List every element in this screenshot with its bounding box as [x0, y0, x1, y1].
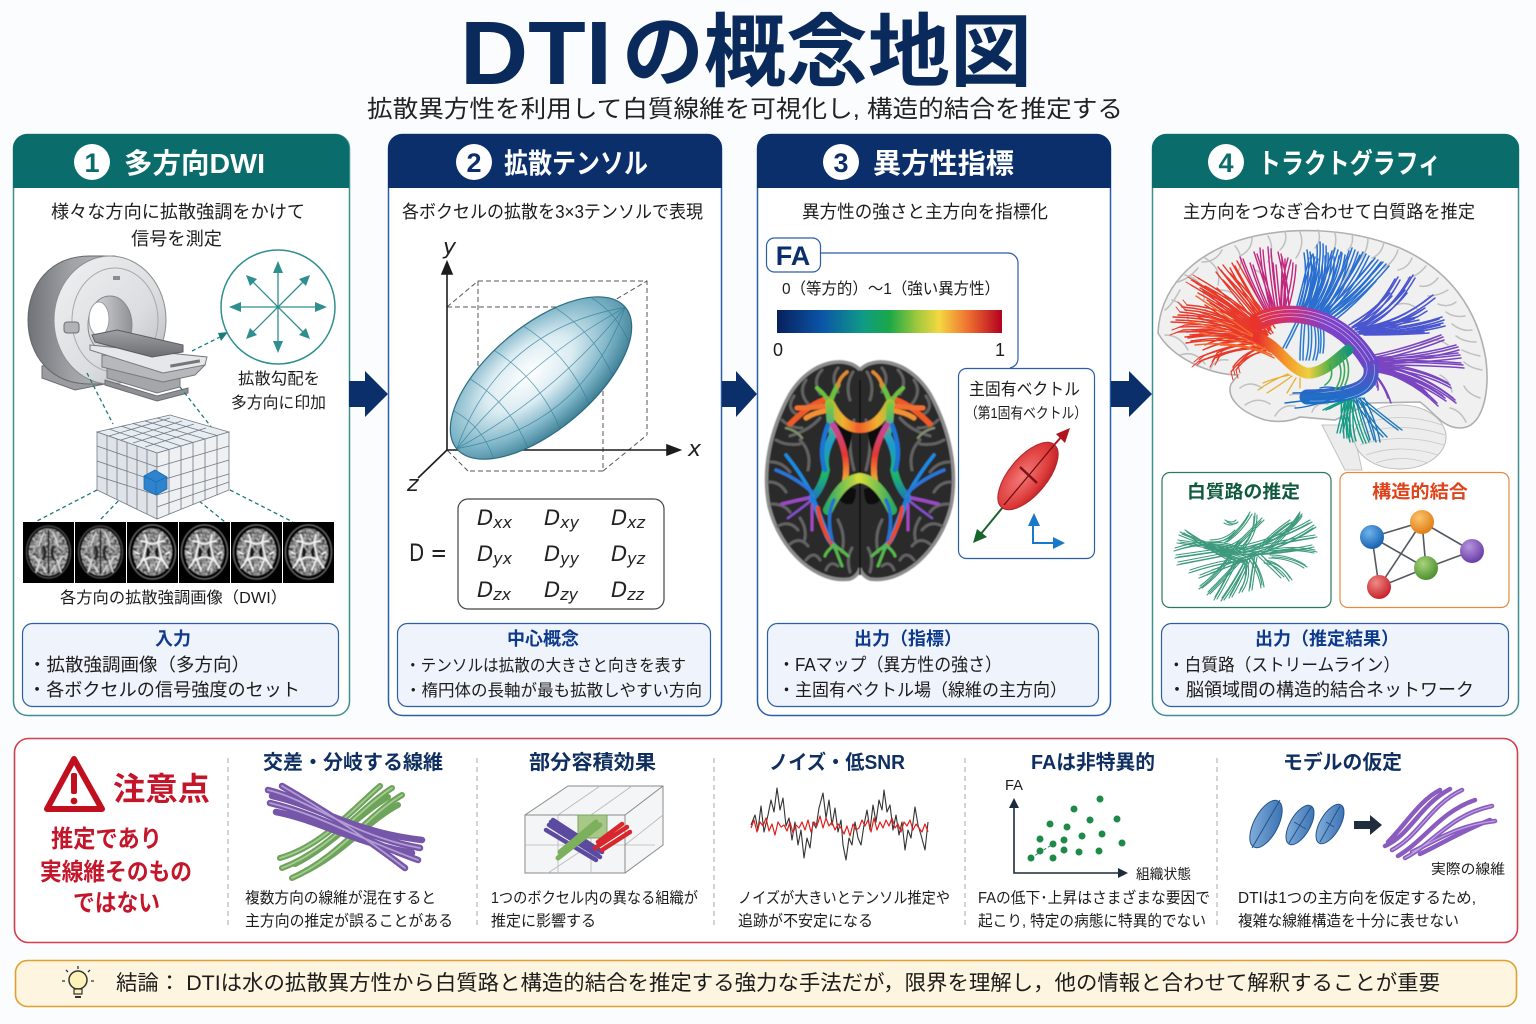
panel 1 description: 様々な方向に拡散強調をかけて: [51, 202, 305, 222]
tensor matrix: D: [611, 578, 627, 602]
input box: ・各ボクセルの信号強度のセット: [28, 680, 300, 700]
green fill of small gap: [1325, 355, 1348, 390]
tensor matrix: [409, 499, 664, 609]
panel 2 header: [388, 134, 722, 188]
eigenvector box: （第1固有ベクトル）: [965, 405, 1087, 422]
panel 2 description: 各ボクセルの拡散を3×3テンソルで表現: [402, 202, 703, 222]
chart: FA scatter: FA: [1005, 777, 1023, 794]
arrow: step 1 to 2: [349, 371, 388, 417]
panel 1 description: [51, 202, 305, 249]
diffusion ellipsoid: [423, 267, 659, 489]
output box panel 3: [768, 624, 1098, 706]
magenta fibre fan: [1240, 247, 1296, 318]
panel: 2 diffusion tensor: [388, 134, 722, 716]
panel: cautions: [14, 738, 1518, 942]
caution: FA nonspecific: [978, 751, 1210, 930]
blue streamlines under arch: [1285, 387, 1350, 408]
title: の概念地図: [622, 8, 1032, 97]
caution: crossing fibres: 交差・分岐する線維: [263, 751, 443, 774]
blue upward fibre fan: [1295, 242, 1389, 321]
caution statement: 推定であり: [51, 826, 162, 853]
panel 2 header: 拡散テンソル: [504, 148, 648, 179]
subtitle: 拡散異方性を利用して白質線維を可視化し, 構造的結合を推定する: [367, 96, 1123, 123]
green streamlines: [1174, 512, 1317, 601]
title: DTI: [460, 4, 612, 104]
chart: dashed box and axes: z: [406, 472, 419, 497]
yellow fibres: [1258, 374, 1300, 393]
icon: tensors to real fibres: 実際の線維: [1431, 861, 1505, 877]
caution: crossing fibres: [245, 751, 453, 930]
eigenvector box: 主固有ベクトル: [969, 380, 1080, 399]
gradient label: [231, 370, 326, 412]
tensor matrix: zx: [492, 585, 512, 604]
network edges: [1372, 522, 1472, 587]
tractography brain: [1158, 230, 1487, 470]
tensor matrix: D: [477, 542, 493, 566]
tensor matrix: D: [611, 542, 627, 566]
purple fibre fan: [1370, 335, 1464, 406]
caution: FA nonspecific: 起こり, 特定の病態に特異的でない: [978, 912, 1206, 930]
panel 1 description: 信号を測定: [131, 229, 222, 249]
panel 3 header: 異方性指標: [873, 148, 1014, 179]
output box panel 3: 出力（指標）: [854, 628, 962, 649]
FA colour bar: [773, 310, 1005, 360]
caution heading: 注意点: [113, 771, 210, 807]
network nodes: [1360, 510, 1484, 599]
caution: model assumption: DTIは1つの主方向を仮定するため,: [1238, 889, 1476, 907]
blue-violet fibre fan: [1349, 275, 1445, 335]
central arch bundle: [1257, 309, 1375, 401]
icon: light bulb: [62, 966, 94, 997]
brain stem and cerebellum: [1322, 405, 1446, 470]
FA tab: [766, 238, 820, 272]
core concept box: [398, 624, 710, 706]
panel: 1 multi-direction DWI: [13, 134, 350, 716]
input box: 入力: [155, 629, 191, 649]
panel: 4 tractography: [1152, 134, 1519, 716]
panel 1 header: [13, 134, 349, 188]
lower blue-teal fibres: [1354, 398, 1402, 442]
output box panel 3: ・FAマップ（異方性の強さ）: [778, 655, 1002, 675]
DWI image strip: [23, 522, 334, 583]
caution: partial volume: [491, 751, 698, 930]
dashed connectors: [35, 336, 293, 522]
structural connectivity box: 構造的結合: [1372, 482, 1468, 502]
caution: crossing fibres: 主方向の推定が誤ることがある: [245, 912, 453, 930]
panel 1 header: 1: [84, 148, 100, 178]
gyri folds: [1165, 230, 1482, 422]
red eigen ellipsoid with arrows: [973, 428, 1070, 543]
core concept box: 中心概念: [507, 629, 579, 649]
white matter tract box: 白質路の推定: [1187, 482, 1300, 502]
tensor matrix: D: [544, 506, 560, 530]
panel 3 header: [757, 134, 1111, 188]
caution statement: 実線維そのもの: [40, 859, 192, 886]
output box panel 4: [1162, 624, 1508, 706]
DWI caption: 各方向の拡散強調画像（DWI）: [60, 589, 287, 607]
core concept box: ・テンソルは拡散の大きさと向きを表す: [405, 656, 686, 675]
lower teal fibres: [1323, 399, 1369, 443]
panel 4 header: 4: [1218, 148, 1234, 178]
input box: ・拡散強調画像（多方向）: [28, 655, 250, 675]
caution: model assumption: [1238, 750, 1505, 930]
caution statement: ではない: [73, 890, 160, 917]
blue axis icon: [1028, 513, 1065, 549]
title: [460, 4, 1032, 104]
gradient label: 多方向に印加: [231, 394, 326, 412]
chart: dashed box and axes: y: [442, 235, 457, 260]
caution: crossing fibres: 複数方向の線維が混在すると: [245, 889, 436, 907]
core concept box: ・楕円体の長軸が最も拡散しやすい方向: [405, 681, 702, 700]
tensor matrix: D =: [409, 539, 447, 567]
tensor matrix: zy: [559, 585, 579, 604]
conclusion bar: 結論： DTIは水の拡散異方性から白質路と構造的結合を推定する強力な手法だが，限界を理解し，他の情報と合わせて解釈することが重要: [116, 972, 1440, 995]
caution: model assumption: モデルの仮定: [1283, 750, 1402, 774]
tensor matrix: zz: [626, 585, 645, 604]
panel 2 header: 2: [466, 148, 482, 178]
white matter tract box: [1162, 472, 1331, 608]
output box panel 4: ・脳領域間の構造的結合ネットワーク: [1168, 680, 1474, 700]
orange-red fibre overlay: [1190, 296, 1274, 358]
cerebrum outline: [1158, 231, 1487, 428]
caution statement: [40, 826, 192, 917]
FA colour bar: 1: [995, 340, 1005, 360]
inner blue fibres: [1283, 322, 1324, 360]
icon: crossing bundles: [268, 786, 422, 878]
panel: 3 anisotropy metrics: [757, 134, 1111, 716]
tensor matrix: yx: [492, 549, 513, 568]
structural connectivity box: [1340, 472, 1509, 608]
FA tab: FA: [776, 241, 810, 271]
caution: FA nonspecific: FAの低下･上昇はさまざまな要因で: [978, 888, 1210, 907]
icon: MRI scanner: [28, 256, 207, 401]
tensor matrix: xz: [626, 513, 646, 532]
input box: [22, 624, 338, 706]
tensor matrix: xx: [492, 513, 513, 532]
caution: partial volume: 部分容積効果: [529, 751, 656, 774]
panel 3 description: 異方性の強さと主方向を指標化: [802, 202, 1048, 222]
icon: warning triangle: [47, 759, 102, 809]
icon: gradient directions: [221, 250, 335, 364]
eigenvector box: [958, 368, 1094, 558]
tensor matrix: D: [544, 542, 560, 566]
lower rainbow bundle: [1258, 338, 1348, 373]
caution: FA nonspecific: FAは非特異的: [1031, 751, 1155, 774]
arrowhead to gradient circle: [218, 332, 228, 341]
FA colour bar: 0: [773, 340, 783, 360]
arrow: step 3 to 4: [1111, 371, 1152, 417]
caution: model assumption: 複雑な線維構造を十分に表せない: [1238, 912, 1459, 930]
FA callout frame: [820, 253, 1018, 368]
chart: dashed box and axes: x: [687, 437, 702, 462]
caution: noise: [738, 750, 950, 930]
caution: noise: ノイズが大きいとテンソル推定や: [738, 889, 950, 907]
panel 4 header: [1152, 134, 1519, 188]
output box panel 3: ・主固有ベクトル場（線維の主方向）: [778, 680, 1067, 700]
chart: FA scatter: [1005, 777, 1191, 882]
caution: noise: ノイズ・低SNR: [769, 750, 906, 774]
panel 3 header: 3: [833, 148, 849, 178]
caution: partial volume: 推定に影響する: [491, 912, 596, 930]
FA range label: 0（等方的）～1（強い異方性）: [782, 280, 1000, 298]
panel 4 description: 主方向をつなぎ合わせて白質路を推定: [1183, 202, 1475, 222]
gradient label: 拡散勾配を: [238, 370, 320, 388]
chart: dashed box and axes: [406, 235, 702, 497]
tensor matrix: yz: [626, 549, 646, 568]
tensor matrix: xy: [559, 513, 580, 532]
caution: noise: 追跡が不安定になる: [738, 912, 873, 930]
icon: tensors to real fibres: [1243, 789, 1505, 877]
tensor matrix: yy: [559, 549, 580, 568]
red fibre fan: [1170, 261, 1275, 380]
chart: FA scatter: 組織状態: [1136, 866, 1191, 882]
tensor matrix: D: [544, 578, 560, 602]
tensor matrix: D: [477, 506, 493, 530]
chart: noisy signal: [751, 788, 928, 860]
conclusion bar: [16, 960, 1516, 1006]
panel 4 header: トラクトグラフィ: [1258, 147, 1441, 179]
tensor matrix: D: [611, 506, 627, 530]
tensor matrix: D: [477, 578, 493, 602]
icon: voxel with mixed tissues: [525, 786, 663, 873]
output box panel 4: ・白質路（ストリームライン）: [1168, 655, 1400, 675]
FA colour map brain: [767, 362, 953, 580]
panel 1 header: 多方向DWI: [124, 148, 265, 179]
output box panel 4: 出力（推定結果）: [1255, 629, 1399, 649]
caution: partial volume: 1つのボクセル内の異なる組織が: [491, 889, 698, 907]
icon: voxel cube: [97, 415, 229, 519]
arrow: step 2 to 3: [722, 371, 757, 417]
